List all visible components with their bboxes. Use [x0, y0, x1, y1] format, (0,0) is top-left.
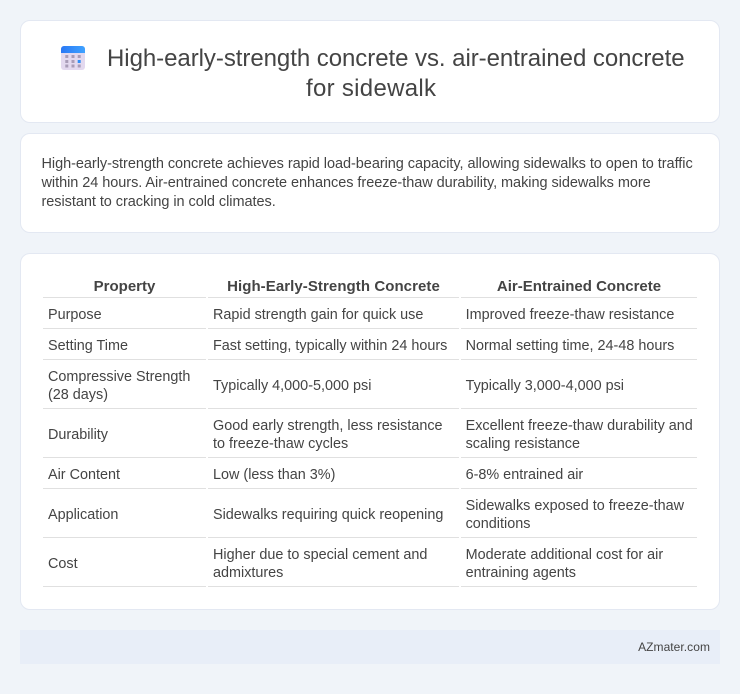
row: durability: Good early strength, less resistance: [213, 418, 443, 434]
title: High-early-strength concrete vs. air-entrained concrete: [107, 45, 685, 72]
table header: [94, 278, 661, 295]
table header: Air-Entrained Concrete: [497, 278, 661, 295]
row: cost: [48, 547, 663, 581]
row: purpose: [48, 307, 674, 323]
row: purpose: Rapid strength gain for quick use: [213, 307, 423, 323]
summary text: within 24 hours. Air-entrained concrete enhances freeze-thaw durability, making sidewalks more: [42, 175, 651, 191]
row: application: Sidewalks exposed to freeze-thaw: [466, 498, 684, 514]
row: compressive strength: Compressive Strength: [48, 369, 190, 385]
row: cost: admixtures: [213, 565, 283, 581]
panel: comparison table: [20, 253, 720, 610]
row: durability: Excellent freeze-thaw durability and: [466, 418, 693, 434]
summary text: High-early-strength concrete achieves rapid load-bearing capacity, allowing sidewalks to open to traffic: [42, 156, 693, 172]
row: air content: [48, 467, 583, 483]
footer credit: AZmater.com: [638, 640, 710, 654]
table header: Property: [94, 278, 155, 295]
row: cost: Higher due to special cement and: [213, 547, 427, 563]
row: compressive strength: (28 days): [48, 387, 108, 403]
row: setting time: Normal setting time, 24-48 hours: [466, 338, 674, 354]
row: purpose: Improved freeze-thaw resistance: [466, 307, 674, 323]
row: air content: Air Content: [48, 467, 120, 483]
row: durability: [48, 418, 693, 452]
row: durability: Durability: [48, 427, 108, 443]
row: application: Sidewalks requiring quick reopening: [213, 507, 443, 523]
row: durability: scaling resistance: [466, 436, 580, 452]
title: [107, 45, 685, 102]
summary text: [42, 156, 693, 210]
panel: title card: [20, 20, 720, 123]
row: application: conditions: [466, 516, 530, 532]
icon: calendar: [61, 46, 85, 70]
row: cost: entraining agents: [466, 565, 576, 581]
row: setting time: Fast setting, typically within 24 hours: [213, 338, 447, 354]
row: purpose: Purpose: [48, 307, 102, 323]
summary text: resistant to cracking in cold climates.: [42, 194, 276, 210]
row: cost: Moderate additional cost for air: [466, 547, 663, 563]
row: application: [48, 498, 684, 532]
row: application: Application: [48, 507, 118, 523]
table header: High-Early-Strength Concrete: [227, 278, 440, 295]
row: air content: Low (less than 3%): [213, 467, 335, 483]
panel: summary: [20, 133, 720, 233]
footer: [20, 630, 720, 664]
row: setting time: Setting Time: [48, 338, 128, 354]
row: air content: 6-8% entrained air: [466, 467, 583, 483]
row: cost: Cost: [48, 556, 78, 572]
row: setting time: [48, 338, 674, 354]
row: compressive strength: Typically 3,000-4,000 psi: [466, 378, 624, 394]
row: durability: to freeze-thaw cycles: [213, 436, 348, 452]
row: compressive strength: [48, 369, 624, 403]
row: compressive strength: Typically 4,000-5,000 psi: [213, 378, 371, 394]
title: for sidewalk: [306, 75, 436, 102]
